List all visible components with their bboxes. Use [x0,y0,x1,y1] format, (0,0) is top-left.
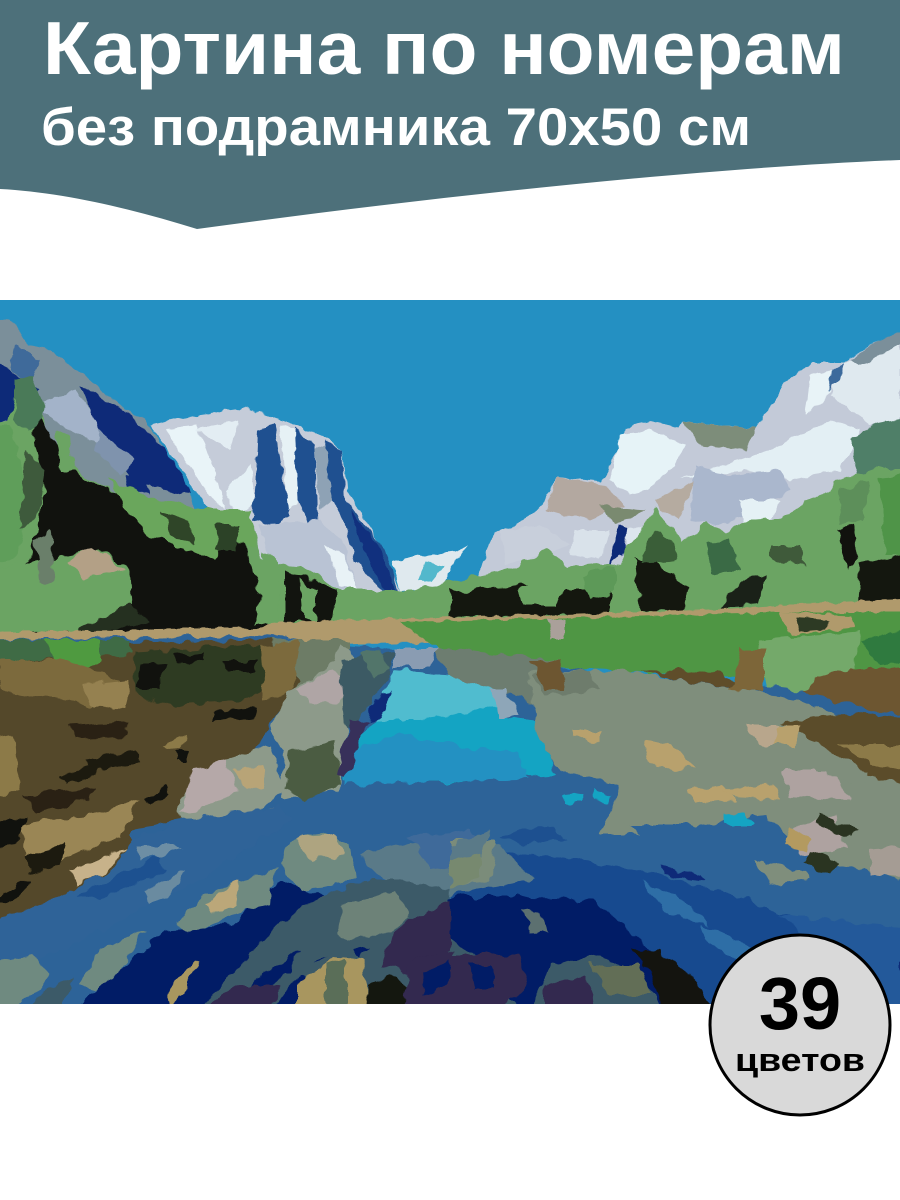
right tree dark bands [450,585,610,618]
shoreline and meadow [0,598,900,700]
left mountains [0,318,470,600]
header banner [0,0,900,229]
badge label: цветов [735,1042,865,1078]
subtitle: без подрамника 70х50 см [41,98,751,157]
brown left shallows [0,640,300,925]
forests [0,375,900,640]
left blue foreground [0,808,282,920]
right grey reflection [527,670,900,885]
title: Картина по номерам [43,6,845,90]
lake water [0,636,900,1020]
grey reflection [270,645,355,800]
cyan reflection [343,670,555,782]
rocks [280,833,355,890]
badge number: 39 [759,962,841,1045]
sky [0,300,900,687]
left slope base [0,397,900,624]
painting: mountain lake landscape [0,300,900,1020]
right mountains [477,330,900,585]
pink rock patch [175,745,285,820]
centre cliff [150,408,400,600]
badge: 39 colours [710,935,890,1115]
blue bands [451,852,799,1004]
grey shoreline reflection behind [265,640,350,720]
dark streaks [85,752,140,772]
navy foreground [82,881,661,1004]
small cyan accents [722,812,752,825]
tree reflection [133,645,265,705]
base [0,636,900,1020]
distant peak [392,545,470,592]
